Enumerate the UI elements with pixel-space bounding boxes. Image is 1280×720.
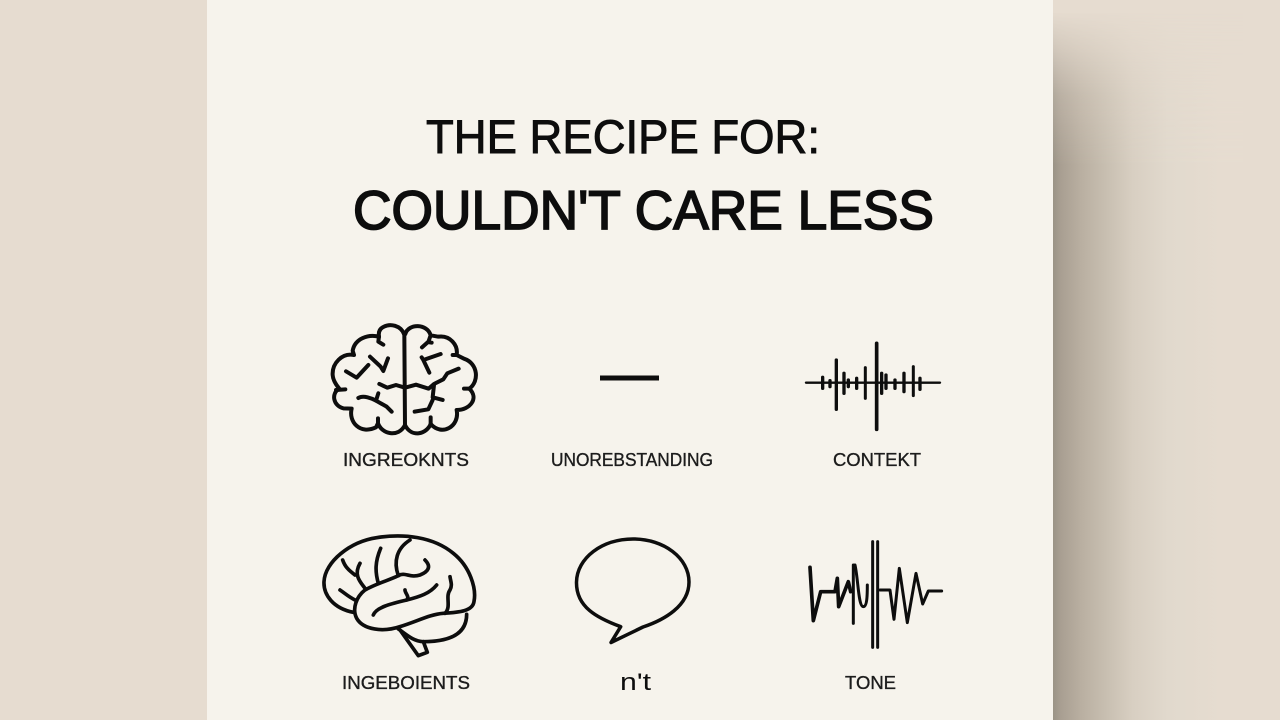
label: ingredients 1: INGREOKNTS [343,449,469,470]
paper panel [207,0,1053,720]
label: understanding: UNOREBSTANDING [551,449,713,470]
title line 1: THE RECIPE FOR: [426,110,820,163]
label: tone: TONE [845,672,896,693]
icon: brain side view [324,536,475,656]
label: ingredients 2: INGEBOIENTS [342,672,470,693]
icon: brain top view [333,325,476,433]
icon: waveform context [806,343,940,429]
label: context: CONTEKT [833,449,921,470]
icon: waveform tone [810,542,942,647]
icon: speech bubble [576,539,689,642]
page shadow on right [1053,25,1156,720]
icon: dash [600,376,659,380]
label: n't: n't [620,669,651,696]
title line 2: COULDN'T CARE LESS [353,179,934,241]
